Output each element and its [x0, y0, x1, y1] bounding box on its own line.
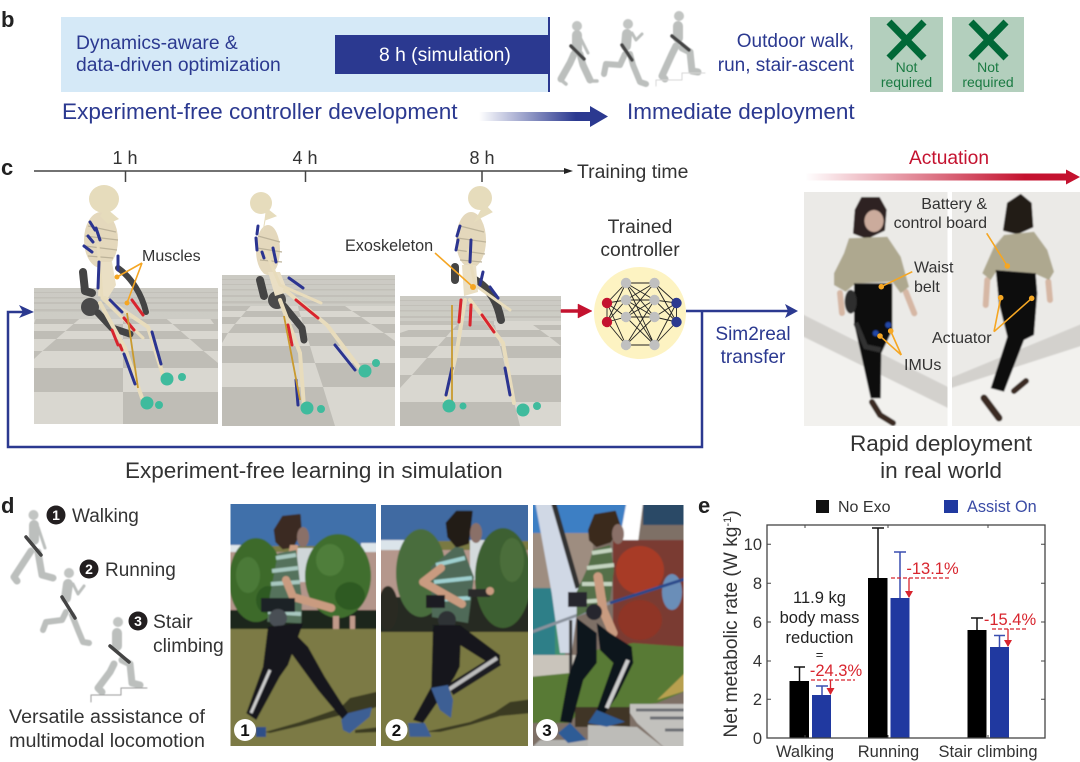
bars: running: [868, 528, 910, 738]
optimization text: Dynamics-aware &: [76, 33, 238, 54]
axes frame: [767, 525, 1045, 738]
device callouts on photos: control board: [894, 215, 987, 232]
walking mode: [14, 506, 139, 581]
badge 2: 2: [392, 721, 401, 740]
text: outdoor modes: run, stair-ascent: [718, 55, 855, 76]
trained controller label: Trained: [608, 217, 672, 238]
device callouts on photos: Battery &: [921, 196, 987, 213]
arrow: feedback loop and sim2real transfer: [8, 304, 798, 447]
panel: simulation at 4 h: [222, 192, 395, 426]
reduction annotations: [810, 560, 1036, 695]
badge 2: [386, 719, 408, 741]
muscles callout: Muscles: [142, 248, 201, 265]
walking mode: 1: [52, 507, 60, 523]
checker floor 2: [222, 275, 395, 426]
training time axis: Training time: [577, 161, 688, 183]
checker floor 3: [400, 296, 561, 426]
y axis title: ): [721, 510, 742, 517]
heading: rapid deployment in real world: in real world: [880, 458, 1002, 483]
training time axis: [34, 148, 688, 183]
badge 3: [536, 719, 558, 741]
training time axis: 4 h: [292, 148, 318, 168]
dark simulation bar: [335, 35, 549, 74]
y axis tick labels: 10: [744, 536, 762, 554]
text: outdoor modes: Outdoor walk,: [737, 31, 854, 52]
panel c label: c: [1, 155, 13, 180]
bars: walking: [790, 667, 831, 738]
category labels: Running: [858, 743, 919, 761]
climbing person: [558, 512, 633, 743]
sim2real transfer label: transfer: [721, 347, 786, 368]
panel b: controller development timeline: [61, 17, 550, 92]
heading: rapid deployment in real world: [850, 431, 1033, 483]
y axis title: -1: [722, 517, 734, 527]
caption: versatile assistance: [9, 706, 205, 752]
y axis title: Net metabolic rate (W kg: [721, 527, 742, 738]
training time axis: 8 h: [469, 148, 495, 168]
device callouts on photos: Waist: [914, 260, 954, 276]
badge 3: 3: [542, 721, 552, 740]
caption: versatile assistance: Versatile assistance of: [9, 706, 205, 728]
photo: exosuit rear view: [948, 188, 1080, 430]
skeleton figure 2: [250, 192, 380, 414]
running mode: Running: [105, 560, 176, 581]
locomotion mode list: [14, 506, 224, 702]
panel: simulation at 8 h: [345, 186, 561, 426]
y axis tick labels: 2: [753, 691, 762, 709]
exoskeleton callout: [345, 237, 476, 290]
not required box 2: required: [962, 74, 1014, 90]
not required box 2: [952, 17, 1024, 92]
photo 2: running: [377, 501, 532, 750]
y axis tick labels: 0: [753, 730, 762, 748]
not required box 1: Not: [896, 59, 917, 75]
panel e label: e: [698, 493, 710, 518]
panel d label: d: [1, 493, 14, 518]
reduction annotations: -24.3%: [810, 662, 862, 680]
badge 1: 1: [240, 721, 250, 740]
caption: versatile assistance: multimodal locomotion: [9, 730, 205, 752]
not required box 1: required: [881, 74, 932, 90]
panel b: controller development timeline: data-driven optimization: [76, 55, 281, 76]
device callouts on photos: belt: [914, 279, 940, 296]
checker floor 1: [34, 288, 218, 424]
legend: [816, 498, 1037, 516]
annotation: body mass reduction: [780, 589, 859, 662]
stair climbing mode: [91, 612, 224, 702]
skeleton figure 1: [81, 185, 186, 410]
category labels: [776, 743, 1038, 761]
device callouts on photos: [877, 196, 1034, 374]
skeleton figure 3: [442, 186, 541, 416]
stair climbing mode: Stair: [153, 612, 193, 633]
annotation: body mass reduction: 11.9 kg: [793, 589, 846, 607]
category labels: Walking: [776, 743, 834, 761]
stair climbing mode: climbing: [153, 636, 224, 657]
not required box 2: Not: [977, 59, 999, 75]
legend: No Exo: [838, 499, 891, 516]
trained controller label: controller: [600, 240, 680, 261]
training time axis: 1 h: [112, 148, 138, 168]
bar chart: net metabolic rate: [721, 510, 1045, 761]
heading: experiment-free learning in simulation: Experiment-free learning in simulation: [125, 458, 503, 483]
reduction annotations: -15.4%: [984, 611, 1036, 629]
y axis tick labels: [744, 536, 762, 748]
text: outdoor modes: [718, 31, 855, 76]
person front view: [834, 198, 914, 423]
device callouts on photos: Actuator: [932, 330, 992, 347]
arrow: development to deployment: [479, 106, 608, 127]
reduction annotations: -13.1%: [906, 560, 959, 578]
sim2real transfer label: [715, 324, 791, 368]
photo 1: walking: [226, 500, 380, 750]
light blue optimization bar: [61, 17, 549, 92]
exoskeleton callout: Exoskeleton: [345, 237, 433, 255]
y axis tick labels: 6: [753, 614, 762, 632]
running mode: 2: [85, 561, 93, 577]
annotation: body mass reduction: reduction: [786, 629, 853, 647]
muscles callout: [114, 248, 201, 306]
device callouts on photos: IMUs: [904, 357, 941, 374]
not required box 1: [870, 17, 943, 92]
bars: stair climbing: [968, 618, 1009, 738]
stair climbing mode: 3: [134, 613, 142, 629]
trained controller label: [600, 217, 680, 261]
neural network icon: [594, 267, 686, 359]
running person: [408, 512, 500, 737]
icon: three locomotion figures: [561, 11, 705, 86]
walking person: [246, 515, 372, 737]
y axis tick labels: 4: [753, 652, 762, 670]
running mode: [43, 560, 176, 643]
actuation label: Actuation: [909, 148, 989, 169]
panel: simulation at 1 h: [34, 185, 218, 424]
badge 1: [234, 719, 256, 741]
legend: Assist On: [967, 498, 1037, 516]
simulation duration text: 8 h (simulation): [379, 45, 511, 66]
annotation: body mass reduction: =: [816, 647, 823, 662]
panel b label: b: [1, 7, 14, 32]
annotation: body mass reduction: body mass: [780, 609, 859, 627]
photo 3: stair climbing: [529, 501, 688, 750]
category labels: Stair climbing: [938, 743, 1038, 761]
walking mode: Walking: [72, 506, 139, 527]
arrow: simulation to trained controller: [561, 304, 592, 318]
heading: immediate deployment: Immediate deployment: [627, 99, 855, 124]
arrow: actuation: [805, 170, 1080, 184]
y axis tick labels: 8: [753, 575, 762, 593]
heading: rapid deployment in real world: Rapid deployment: [850, 431, 1033, 456]
photo: exosuit front view: [800, 188, 950, 430]
sim2real transfer label: Sim2real: [715, 324, 791, 345]
heading: experiment-free controller development: Experiment-free controller development: [62, 99, 458, 124]
person rear view: [982, 195, 1054, 418]
